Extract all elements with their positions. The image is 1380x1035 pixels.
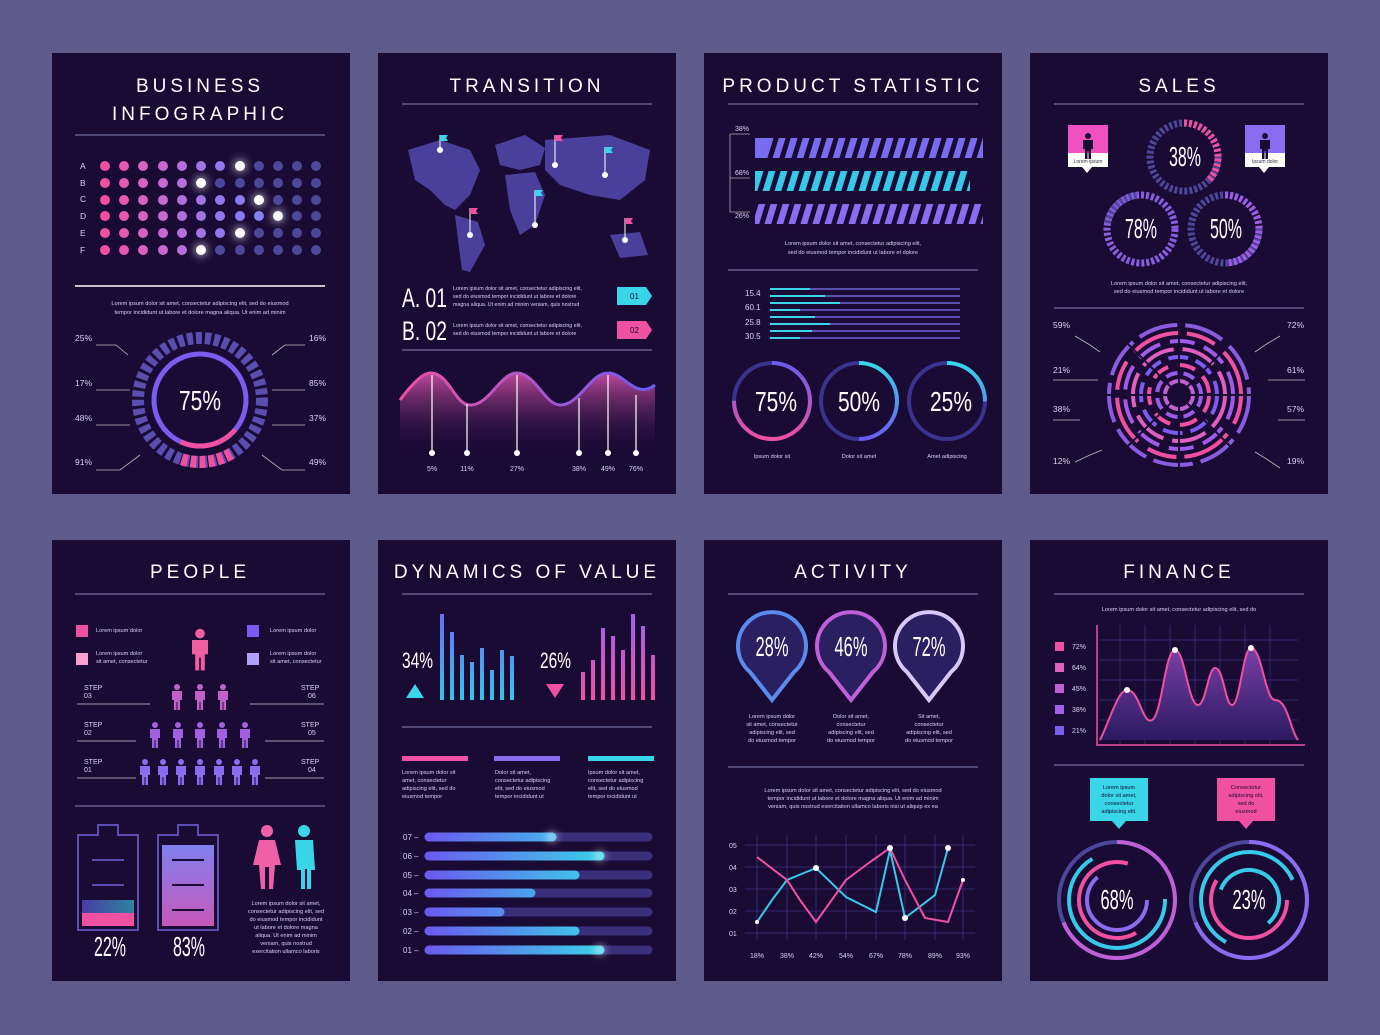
callouts: adipiscing elit, <box>1228 793 1264 799</box>
legend: 38% <box>1072 707 1086 714</box>
callouts: sed do <box>1238 801 1254 807</box>
bar chart: pink <box>540 614 653 700</box>
map pins: 72% <box>912 631 946 662</box>
horizontal bar chart: 07 – <box>403 833 419 842</box>
donut chart 75% <box>115 315 285 485</box>
legend <box>1055 642 1086 735</box>
panel: finance <box>1030 540 1328 981</box>
legend: Lorem ipsum dolor <box>96 651 142 657</box>
legend A.01 / B.02: Lorem ipsum dolor sit amet, consectetur adipiscing elit, <box>453 286 582 292</box>
text block: Lorem ipsum dolor sit amet, consectetur adipiscing elit, sed do eiusmod <box>764 788 942 794</box>
title: dynamics of value: DYNAMICS OF VALUE <box>394 562 660 583</box>
three donuts: 25% <box>930 386 972 417</box>
map pins: do eiusmod tempor <box>827 738 875 744</box>
panel: sales: 78% <box>1125 213 1157 244</box>
panel: sales <box>1030 53 1328 494</box>
legend: Lorem ipsum dolor <box>270 628 316 634</box>
text block <box>248 901 324 955</box>
wave chart: 49% <box>601 466 615 473</box>
three text columns: consectetur adipiscing <box>588 778 643 784</box>
line bars: 25.8 <box>745 318 761 327</box>
line chart: 38% <box>780 953 794 960</box>
striped bars <box>730 126 983 224</box>
ring charts <box>1059 834 1315 966</box>
legend A.01 / B.02: Lorem ipsum dolor sit amet, consectetur adipiscing elit, <box>453 323 582 329</box>
line chart: 89% <box>928 953 942 960</box>
line bars: 15.4 <box>745 289 761 298</box>
text block: tempor incididunt ut labore et dolore magna aliqua. Ut enim ad minim <box>767 796 939 802</box>
step labels: 03 <box>84 693 92 700</box>
donut labels: 25% <box>75 333 92 343</box>
panel: dynamics of value <box>378 540 676 981</box>
donut labels: 17% <box>75 378 92 388</box>
callouts: consectetur <box>1105 801 1134 807</box>
three text columns: consectetur adipiscing <box>495 778 550 784</box>
battery gauges: 22% <box>94 931 126 962</box>
wave chart: 5% <box>427 466 437 473</box>
callouts: Lorem ipsum <box>1103 785 1135 791</box>
legend: 64% <box>1072 665 1086 672</box>
line chart: 01 <box>729 931 737 938</box>
three text columns: eiusmod tempor <box>402 794 442 800</box>
horizontal bar chart: 05 – <box>403 871 419 880</box>
radial chart: 38% <box>1053 404 1070 414</box>
bar chart: blue: 34% <box>402 648 433 673</box>
panel: product statistic <box>704 53 1006 494</box>
map pins: sit amet, consectetur <box>746 722 798 728</box>
panel: activity <box>704 540 1002 981</box>
callouts: adipiscing elit. <box>1101 809 1137 815</box>
icon: man and woman <box>253 825 315 889</box>
callouts: eiusmod <box>1235 809 1257 815</box>
wave chart <box>400 373 655 473</box>
legend: sit amet, consectetur <box>270 659 322 665</box>
donut labels: 49% <box>309 457 326 467</box>
three text columns: elit, sed do eiusmod <box>588 786 638 792</box>
map pins: do eiusmod tempor <box>748 738 796 744</box>
three donuts: 75% <box>755 386 797 417</box>
panel: business infographic <box>52 53 350 494</box>
text block: sed do eiusmod tempor incididunt ut labore et dolore <box>788 250 918 256</box>
line chart: 03 <box>729 887 737 894</box>
three text columns: adipiscing elit, sed do <box>402 786 456 792</box>
map pins: adipiscing elit, sed <box>749 730 795 736</box>
step labels: 06 <box>308 693 316 700</box>
dot matrix chart <box>80 159 321 257</box>
three text columns: elit, sed do eiusmod <box>495 786 545 792</box>
legend: sit amet, consectetur <box>96 659 148 665</box>
wave chart: 38% <box>572 466 586 473</box>
legend A.01 / B.02: sed do eiusmod tempor incididunt ut labore et dolore <box>453 331 576 337</box>
legend A.01 / B.02 <box>402 283 652 346</box>
line chart: 67% <box>869 953 883 960</box>
line chart: 04 <box>729 865 737 872</box>
three donuts: Dolor sit amet <box>842 454 877 460</box>
title: business infographic <box>112 76 288 125</box>
three donuts: Amet adipiscing <box>927 454 967 460</box>
map pins: adipiscing elit, sed <box>906 730 952 736</box>
legend: Lorem ipsum dolor <box>96 628 142 634</box>
map pins: consectetur <box>837 722 866 728</box>
legend: 21% <box>1072 728 1086 735</box>
striped bars: 26% <box>735 213 749 220</box>
dot matrix chart: C <box>80 194 86 204</box>
text block: Lorem ipsum dolor sit amet, consectetur adipiscing elit, sed do eiusmod <box>111 301 289 307</box>
donut labels: 85% <box>309 378 326 388</box>
text block <box>1111 281 1248 295</box>
title: finance: FINANCE <box>1123 562 1235 583</box>
map pins: 46% <box>834 631 868 662</box>
step labels: 04 <box>308 767 316 774</box>
text block: aliqua. Ut enim ad minim <box>255 933 317 939</box>
line chart: 18% <box>750 953 764 960</box>
line chart: 02 <box>729 909 737 916</box>
donut labels: 48% <box>75 413 92 423</box>
panel: transition <box>378 53 676 494</box>
title: sales: SALES <box>1138 76 1220 97</box>
title: people: PEOPLE <box>150 562 250 583</box>
dot matrix chart: F <box>80 245 85 255</box>
text block: tempor incididunt ut labore et dolore magna aliqua. Ut enim ad minim <box>114 310 286 316</box>
legend A.01 / B.02: 02 <box>630 326 639 335</box>
legend A.01 / B.02: 01 <box>630 292 639 301</box>
radial chart: 57% <box>1287 404 1304 414</box>
line chart: 42% <box>809 953 823 960</box>
legend A.01 / B.02: B. 02 <box>402 316 447 346</box>
title: business infographic: BUSINESS <box>136 76 264 97</box>
battery gauges <box>78 825 218 962</box>
legend: Lorem ipsum dolor <box>270 651 316 657</box>
horizontal bar chart: 01 – <box>403 946 419 955</box>
step labels: STEP <box>301 685 320 692</box>
step labels: STEP <box>84 722 103 729</box>
step labels: 02 <box>84 730 92 737</box>
callouts <box>1090 778 1275 829</box>
text block <box>785 241 922 256</box>
bar chart: blue <box>402 614 512 700</box>
step labels <box>77 685 324 778</box>
step labels: STEP <box>84 685 103 692</box>
callouts: dolor sit amet, <box>1101 793 1137 799</box>
three donuts: Ipsum dolor sit <box>754 454 791 460</box>
dot matrix chart: E <box>80 228 86 238</box>
legend A.01 / B.02: sed do eiusmod tempor incididunt ut labore et dolore <box>453 294 576 300</box>
text block <box>111 301 289 316</box>
line bars <box>745 289 960 341</box>
callouts: Consectetur <box>1231 785 1261 791</box>
area chart <box>1097 625 1305 745</box>
text block <box>764 788 942 810</box>
legend: 72% <box>1072 644 1086 651</box>
text block: do eiusmod tempor incididunt <box>249 917 323 923</box>
horizontal bar chart: 04 – <box>403 889 419 898</box>
donut labels <box>75 333 326 470</box>
three text columns: Dolor sit amet, <box>495 770 532 776</box>
horizontal bar chart: 06 – <box>403 852 419 861</box>
radial chart: 59% <box>1053 320 1070 330</box>
legend <box>76 625 322 665</box>
step labels: 05 <box>308 730 316 737</box>
wave chart: 76% <box>629 466 643 473</box>
text block: veniam, quis nostrud <box>260 941 312 947</box>
donut labels: 91% <box>75 457 92 467</box>
text block: Lorem ipsum dolor sit amet, consectetur adipiscing elit, <box>785 241 922 247</box>
step labels: STEP <box>84 759 103 766</box>
panel: people <box>52 540 350 981</box>
text block: consectetur adipiscing elit, sed <box>248 909 324 915</box>
ring gauges <box>1102 123 1259 268</box>
radial chart: 21% <box>1053 365 1070 375</box>
text block: ut labore et dolore magna <box>254 925 319 931</box>
battery gauges: 83% <box>173 931 205 962</box>
donut labels: 37% <box>309 413 326 423</box>
line bars: 30.5 <box>745 332 761 341</box>
subtitle text: Lorem ipsum dolor sit amet, consectetur adipiscing elit, sed do <box>1102 607 1256 613</box>
bar chart: pink: 26% <box>540 648 571 673</box>
map pins: adipiscing elit, sed <box>828 730 874 736</box>
donut chart 75%: 75% <box>179 385 221 416</box>
donut labels: 16% <box>309 333 326 343</box>
horizontal bar chart: 03 – <box>403 908 419 917</box>
text block: sed do eiusmod tempor incididunt ut labore et dolore <box>1114 289 1244 295</box>
three text columns: Lorem ipsum dolor sit <box>402 770 456 776</box>
map pins: do eiusmod tempor <box>905 738 953 744</box>
three donuts <box>734 363 985 460</box>
striped bars: 38% <box>735 126 749 133</box>
radial chart: 12% <box>1053 456 1070 466</box>
dot matrix chart: D <box>80 211 86 221</box>
panel: sales: 50% <box>1210 213 1242 244</box>
title: activity: ACTIVITY <box>794 562 912 583</box>
text block: Lorem ipsum dolor sit amet, consectetur adipiscing elit, <box>1111 281 1248 287</box>
text block: Lorem ipsum dolor sit amet, <box>251 901 321 907</box>
dot matrix chart: B <box>80 178 86 188</box>
map pins: Lorem ipsum dolor <box>749 714 795 720</box>
three text columns <box>402 756 654 800</box>
striped bars: 68% <box>735 170 749 177</box>
line chart: 93% <box>956 953 970 960</box>
legend: 45% <box>1072 686 1086 693</box>
three text columns: amet, consectetur <box>402 778 447 784</box>
map pins: Dolor sit amet, <box>833 714 869 720</box>
line chart <box>729 835 975 960</box>
map pins: consectetur <box>915 722 944 728</box>
horizontal bar chart: 02 – <box>403 927 419 936</box>
person cards <box>1068 125 1285 173</box>
line chart: 78% <box>898 953 912 960</box>
title: transition: TRANSITION <box>449 76 605 97</box>
radial chart: 72% <box>1287 320 1304 330</box>
person cards: Ipsum dolor <box>1252 159 1278 165</box>
legend A.01 / B.02: A. 01 <box>402 283 447 313</box>
person cards: Lorem ipsum <box>1074 159 1102 165</box>
wave chart: 27% <box>510 466 524 473</box>
line bars: 60.1 <box>745 303 761 312</box>
world map <box>408 135 650 272</box>
line chart: 54% <box>839 953 853 960</box>
horizontal bar chart <box>403 832 648 955</box>
map pins: 28% <box>756 631 788 662</box>
radial chart: 61% <box>1287 365 1304 375</box>
map pins <box>738 612 963 744</box>
step labels: 01 <box>84 767 92 774</box>
panel: sales: 38% <box>1169 141 1201 172</box>
people pyramid <box>140 629 260 785</box>
title: business infographic: INFOGRAPHIC <box>112 104 288 125</box>
dot matrix chart: A <box>80 161 86 171</box>
map pins: Sit amet, <box>918 714 940 720</box>
three text columns: tempor incididunt ut <box>588 794 637 800</box>
three text columns: tempor incididunt ut <box>495 794 544 800</box>
wave chart: 11% <box>460 466 474 473</box>
three donuts: 50% <box>838 386 880 417</box>
title: product statistic: PRODUCT STATISTIC <box>722 76 984 97</box>
text block: exercitation ullamco laboris <box>252 949 320 955</box>
panel: finance: 23% <box>1232 884 1266 915</box>
line chart: 05 <box>729 843 737 850</box>
text block: veniam, quis nostrud exercitation ullamco laboris nisi ut aliquip ex ea <box>768 804 939 810</box>
radial chart <box>1053 320 1305 468</box>
legend A.01 / B.02: magna aliqua. Ut enim ad minim veniam, quis nostrud <box>453 302 579 308</box>
step labels: STEP <box>301 759 320 766</box>
step labels: STEP <box>301 722 320 729</box>
radial chart: 19% <box>1287 456 1304 466</box>
three text columns: Ipsum dolor sit amet, <box>588 770 640 776</box>
panel: finance: 68% <box>1100 884 1134 915</box>
